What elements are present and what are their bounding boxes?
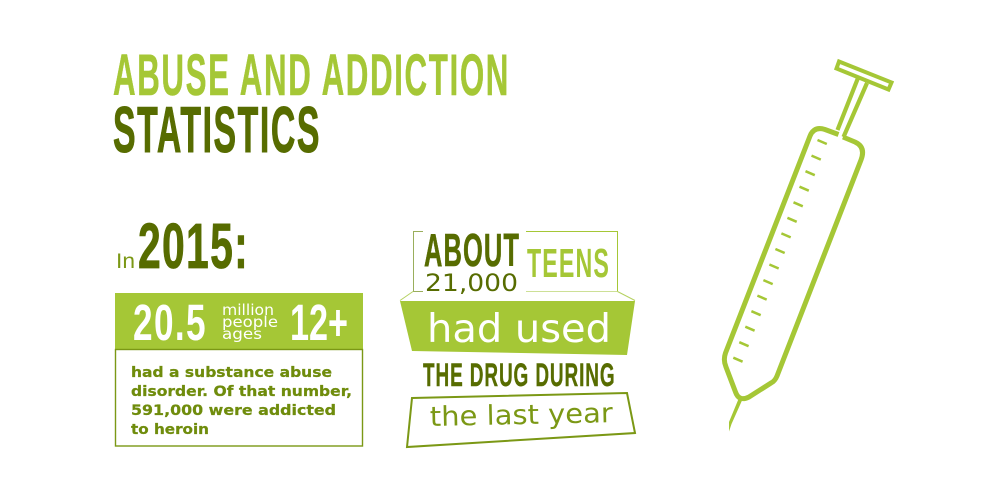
stat body box <box>116 350 362 446</box>
title <box>113 43 510 166</box>
stat body text: had a substance abuse <box>131 365 332 381</box>
stat label: million people ages: ages <box>222 325 262 343</box>
icon: syringe <box>724 62 892 432</box>
plunger handle <box>836 62 892 90</box>
syringe barrel <box>724 129 863 399</box>
stat body text: to heroin <box>131 422 209 438</box>
green ribbon <box>400 301 635 355</box>
stat body text <box>131 365 352 438</box>
stat body text: 591,000 were addicted <box>131 403 336 419</box>
text: 21,000: 21,000 <box>425 269 518 297</box>
measurement ticks <box>733 140 827 362</box>
stat header band <box>115 293 363 349</box>
stat label: million people ages: people <box>222 313 278 331</box>
title line 2: STATISTICS <box>113 93 321 166</box>
plunger rod <box>838 78 867 137</box>
label: In: In <box>116 250 135 273</box>
stat: 20.5: 20.5 <box>133 294 207 351</box>
text: the drug during: THE DRUG DURING <box>423 357 616 393</box>
year heading <box>116 210 249 282</box>
stat label: million people ages: million <box>222 301 274 319</box>
text: about: ABOUT <box>424 224 520 276</box>
stat label: million people ages <box>222 301 278 343</box>
text: teens: TEENS <box>527 240 610 286</box>
outlined teens box <box>414 232 618 292</box>
text: the last year: the last year <box>429 398 614 433</box>
panel: teens stat <box>400 224 635 447</box>
text: had used: had used <box>427 307 611 352</box>
label: 2015: 2015: <box>138 210 249 282</box>
needle <box>729 399 742 432</box>
stat: 12+: 12+ <box>290 294 348 351</box>
outlined skewed box <box>407 393 635 447</box>
panel: substance abuse stat <box>115 293 363 446</box>
fold lines <box>400 292 635 300</box>
title line 1: ABUSE AND ADDICTION <box>113 43 510 108</box>
stat body text: disorder. Of that number, <box>131 384 352 400</box>
